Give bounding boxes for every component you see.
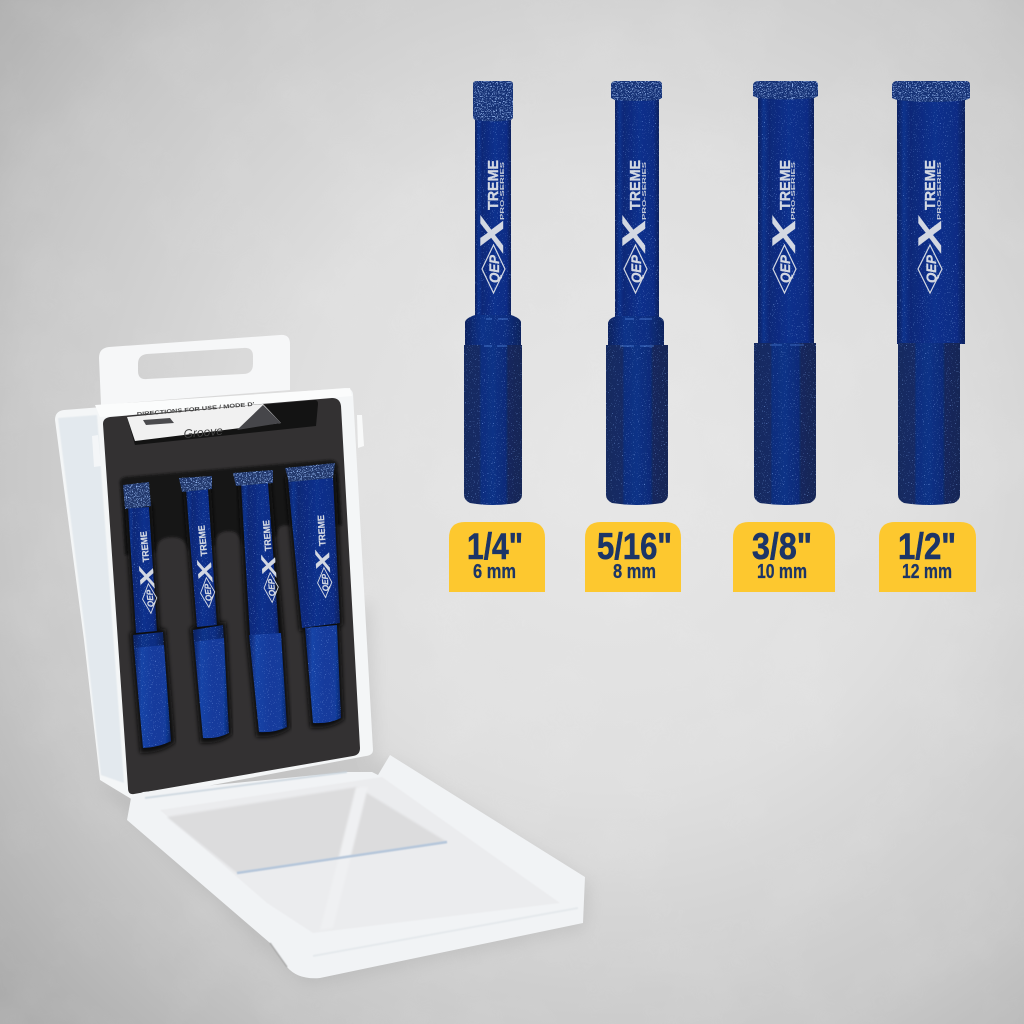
open lid	[127, 755, 585, 978]
size label: 5/16 inch, 8 mm: 8 mm	[613, 561, 656, 583]
logo on bit 2: QEP	[628, 254, 644, 283]
drill bit: 1/2 inch	[892, 81, 970, 505]
logo on bit 3: X	[766, 215, 802, 254]
logo on bit C: TREME	[261, 520, 273, 551]
logo on bit 1: PRO-SERIES	[500, 161, 506, 220]
case shadow	[95, 600, 590, 985]
drill bit: 1/4 inch	[464, 81, 522, 505]
logo on bit 2: PRO-SERIES	[642, 161, 648, 220]
logo on bit C	[255, 519, 283, 603]
size label: 1/2 inch, 12 mm	[879, 522, 976, 592]
logo on bit 2: TREME	[627, 160, 644, 210]
size label: 3/8 inch, 10 mm	[733, 522, 835, 592]
logo on bit 3: PRO-SERIES	[791, 161, 797, 220]
logo on bit A: X	[136, 563, 160, 590]
size label: 5/16 inch, 8 mm	[585, 522, 681, 592]
drill bit: 5/16 inch	[606, 81, 668, 505]
drill bit: 3/8 inch	[753, 81, 818, 505]
bit B in case	[179, 476, 229, 740]
logo on bit B	[191, 524, 220, 608]
logo on bit 4: QEP	[923, 254, 939, 283]
bit C in case	[233, 470, 287, 734]
bit A in case	[123, 482, 172, 750]
logo on bit 2: X	[616, 215, 652, 254]
instruction leaflet: DIRECTIONS FOR USE / MODE D'	[137, 402, 256, 418]
size label: 3/8 inch, 10 mm: 3/8"	[752, 526, 812, 567]
logo on bit B: TREME	[197, 525, 209, 557]
logo on bit 2	[616, 160, 652, 293]
logo on bit B: QEP	[202, 583, 214, 602]
bit D in case	[285, 463, 341, 725]
size label: 1/4 inch, 6 mm: 6 mm	[473, 561, 516, 583]
plastic case with bits	[55, 335, 590, 985]
top pocket for leaflet	[127, 400, 318, 445]
logo on bit D: QEP	[320, 573, 331, 592]
foam fingers between bits	[120, 460, 342, 555]
logo on bit 1: TREME	[485, 160, 502, 210]
size label: 5/16 inch, 8 mm: 5/16"	[597, 526, 672, 567]
logo on bit D	[310, 515, 336, 598]
instruction leaflet	[127, 402, 281, 441]
logo on bit C: QEP	[266, 578, 277, 597]
logo on bit 4	[912, 160, 948, 293]
logo on bit 1	[474, 160, 510, 293]
logo on bit A: TREME	[139, 531, 151, 563]
case back	[55, 388, 373, 800]
logo on bit A	[133, 530, 162, 614]
logo on bit 4: X	[912, 215, 948, 254]
logo on bit 4: PRO-SERIES	[937, 161, 943, 220]
size label: 3/8 inch, 10 mm: 10 mm	[757, 561, 807, 583]
logo on bit 4: TREME	[922, 160, 939, 210]
logo on bit D: TREME	[316, 515, 328, 546]
logo on bit 3: TREME	[777, 160, 794, 210]
size label: 1/2 inch, 12 mm: 1/2"	[898, 526, 956, 567]
logo on bit 1: X	[474, 215, 510, 254]
logo on bit 3	[766, 160, 802, 293]
hanging tab	[99, 335, 290, 405]
size label: 1/4 inch, 6 mm: 1/4"	[467, 526, 523, 567]
size label: 1/2 inch, 12 mm: 12 mm	[902, 561, 952, 583]
black foam insert	[103, 398, 360, 794]
logo on bit 1: QEP	[486, 254, 502, 283]
size label: 1/4 inch, 6 mm	[449, 522, 545, 592]
logo on bit A: QEP	[144, 589, 156, 608]
logo on bit C: X	[258, 553, 281, 579]
logo on bit B: X	[194, 557, 218, 584]
logo on bit D: X	[312, 548, 335, 574]
logo on bit 3: QEP	[777, 254, 793, 283]
instruction leaflet: Groove	[183, 424, 224, 441]
